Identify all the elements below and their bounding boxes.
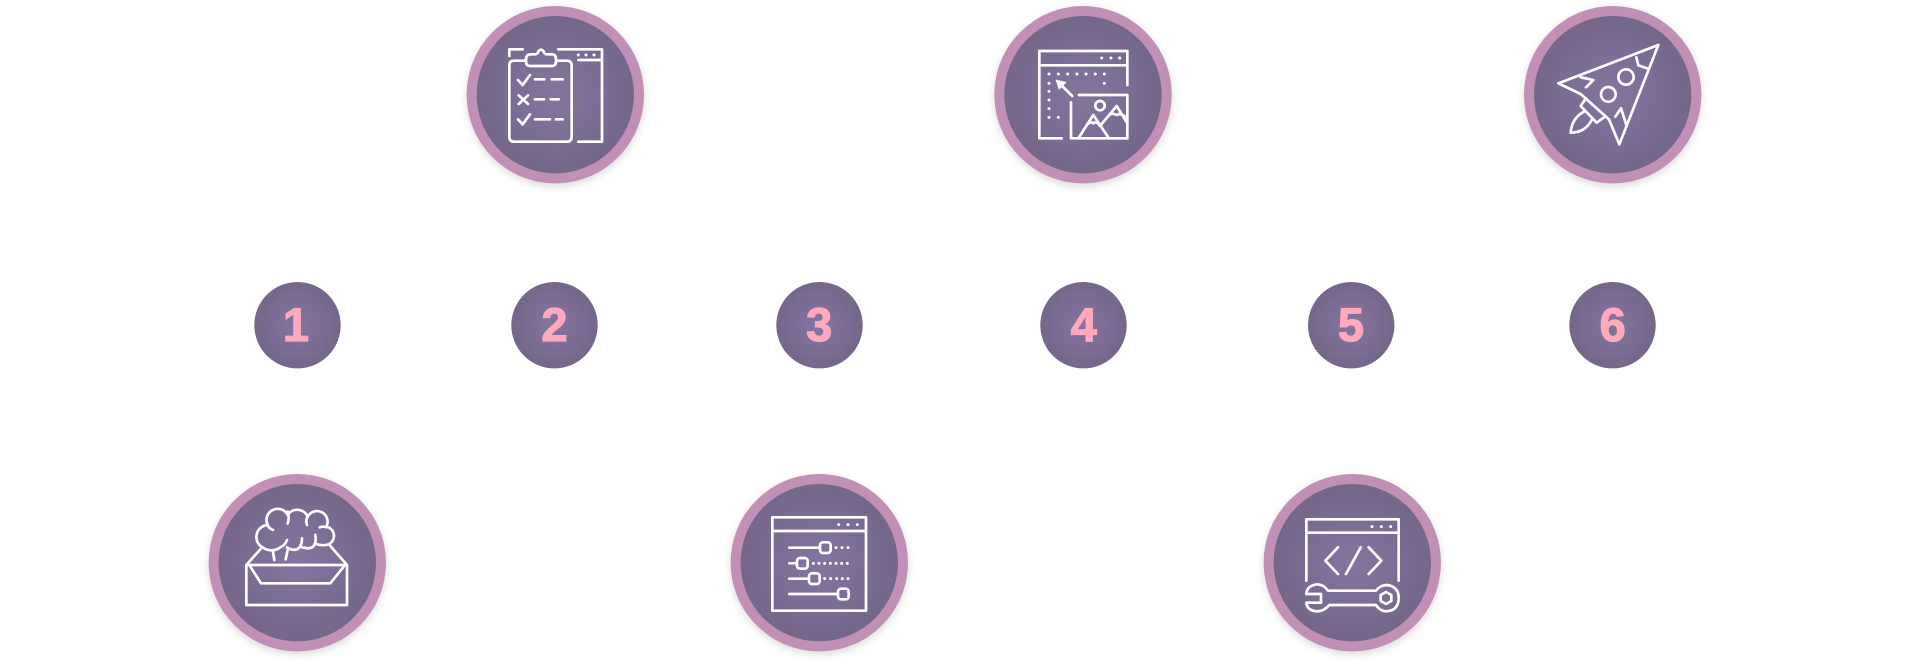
step 1 number bbox=[254, 282, 341, 368]
step 2 number bbox=[511, 282, 598, 368]
step 5 number bbox=[1308, 282, 1394, 368]
step 3 number bbox=[776, 282, 863, 368]
icon: clipboard checklist bbox=[509, 49, 602, 142]
number circles row bbox=[254, 282, 1656, 368]
step 2 number: 2 bbox=[541, 298, 568, 351]
step 5 number: 5 bbox=[1338, 298, 1364, 351]
step 4 number bbox=[1040, 282, 1127, 368]
badge: code window with wrench (step 5) bbox=[1264, 474, 1441, 651]
badge: settings sliders window (step 3) bbox=[731, 474, 908, 651]
step 6 number bbox=[1569, 282, 1656, 368]
badge: clipboard checklist (step 2) bbox=[467, 6, 644, 183]
step 1 number: 1 bbox=[283, 298, 309, 351]
step 4 number: 4 bbox=[1071, 298, 1097, 351]
step 3 number: 3 bbox=[806, 298, 832, 351]
icon: layout window with image bbox=[1039, 51, 1127, 138]
icon: code window and wrench bbox=[1306, 519, 1399, 611]
icon: rocket bbox=[1558, 45, 1658, 144]
badge: rocket (step 6) bbox=[1524, 6, 1701, 183]
badge: brain in a box (step 1) bbox=[209, 474, 386, 651]
step 6 number: 6 bbox=[1600, 298, 1626, 351]
icon: window with sliders bbox=[772, 517, 866, 611]
icon: brain over open box bbox=[246, 509, 347, 605]
badge: window with image placeholder (step 4) bbox=[994, 6, 1172, 183]
